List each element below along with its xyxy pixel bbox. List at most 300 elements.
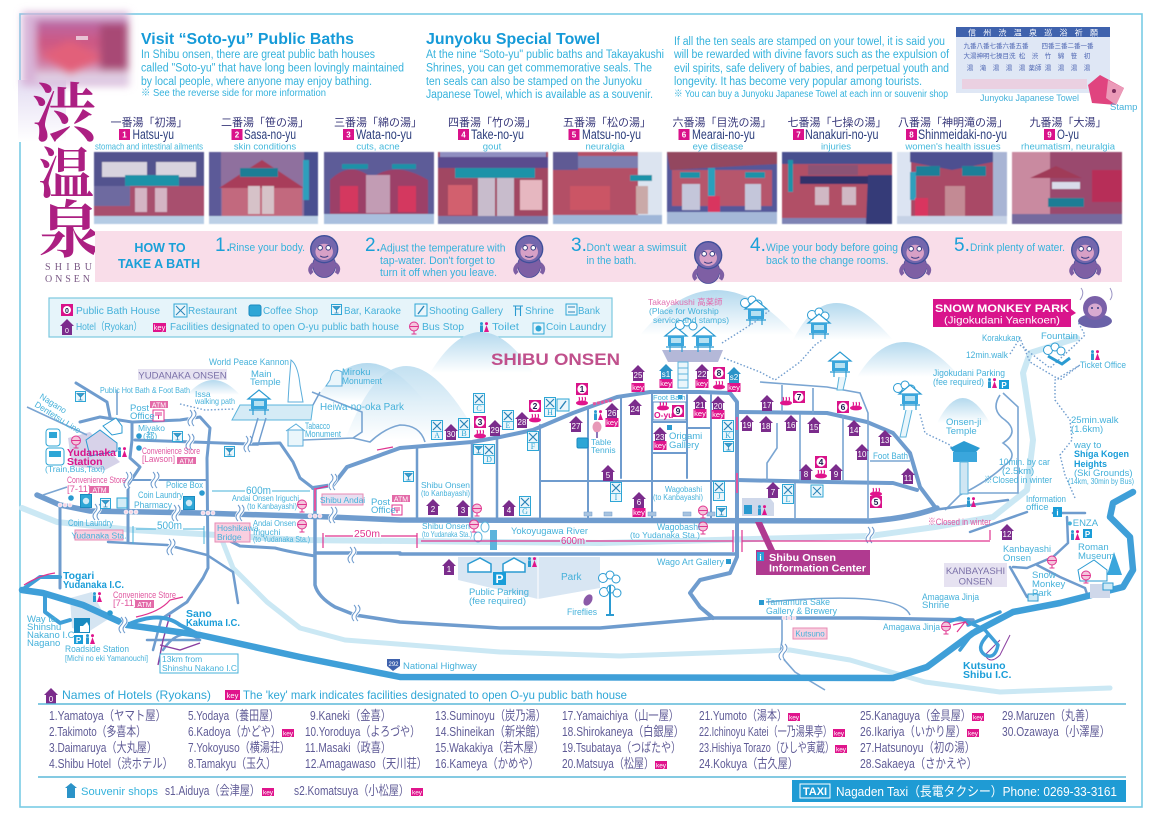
soto-yu photo captions and names: 6 bbox=[682, 130, 687, 140]
map labels: Kanbayashi side: Park bbox=[1032, 588, 1052, 599]
restaurant G: G bbox=[522, 507, 528, 516]
map background hills bbox=[187, 290, 990, 440]
map labels: Shibu town: Yokoyugawa River bbox=[511, 526, 588, 537]
Junyoku towel illustration: 七番 bbox=[990, 41, 1003, 50]
legend: names of hotels: 0 bbox=[49, 695, 54, 704]
restaurant H: H bbox=[547, 408, 553, 417]
bath 1: 1 bbox=[580, 384, 585, 394]
hotel 16: 16 bbox=[787, 421, 796, 430]
Junyoku towel illustration: 二番 bbox=[1068, 42, 1081, 50]
soto-yu photo captions and names: 9 bbox=[1047, 130, 1052, 140]
Junyoku towel illustration: 綿 bbox=[1058, 51, 1065, 60]
Junyoku towel illustration: 八番 bbox=[976, 42, 990, 50]
map labels: Shibu town: Shibu Onsen bbox=[422, 521, 470, 531]
soto-yu photo captions and names: rheumatism, neuralgia bbox=[1021, 142, 1116, 152]
Junyoku towel illustration: 竹 bbox=[1045, 51, 1052, 60]
map labels: Yudanaka side: Togari bbox=[63, 570, 94, 582]
restaurant J: J bbox=[717, 492, 721, 501]
hotel 23: key bbox=[654, 441, 666, 450]
bus stop bbox=[1082, 571, 1090, 583]
map labels: Yudanaka side: Post bbox=[130, 403, 149, 414]
Junyoku towel illustration: 一番 bbox=[1080, 42, 1094, 50]
map labels: Kanbayashi side: Jigokudani Parking bbox=[933, 368, 1005, 379]
hotel 26 bbox=[605, 403, 619, 427]
map labels: Yudanaka side: Monument bbox=[342, 376, 382, 387]
map legend: Coin Laundry bbox=[546, 321, 607, 333]
restaurant B bbox=[458, 418, 470, 438]
soto-yu photo captions and names: Mearai-no-yu bbox=[692, 127, 755, 142]
panel: Shibu Onsen information center: i bbox=[759, 553, 762, 562]
road pink highlights and arrows bbox=[315, 400, 737, 511]
text block: ten seals benefit: will be rewarded with divine favors such as the expulsion of bbox=[673, 49, 950, 61]
map labels: Kanbayashi side: Kutsuno bbox=[963, 660, 1006, 672]
hotel 9: 9 bbox=[834, 470, 839, 479]
parking sign Jigokudani bbox=[999, 380, 1009, 390]
title: Shibu Onsen: SHIBU ONSEN bbox=[491, 350, 620, 369]
soto-yu photo captions and names: Hatsu-yu bbox=[132, 127, 174, 142]
label box: 13km from Shinshu Nakano bbox=[160, 654, 238, 673]
table tennis bbox=[592, 410, 603, 438]
map labels: Shibu town: (Place for Worship bbox=[649, 306, 719, 316]
step 1: Rinse your body. bbox=[229, 242, 305, 254]
list of hotels: 17.Yamaichiya（山一屋） bbox=[562, 708, 679, 723]
Miroku monument bbox=[326, 370, 342, 386]
hotel 22 bbox=[695, 364, 709, 388]
list of hotels: 29.Maruzen（丸善） bbox=[1002, 708, 1095, 723]
bath 9 O-yu: O-yu bbox=[654, 410, 673, 420]
label box: 13km from Shinshu Nakano: 13km from bbox=[162, 654, 202, 664]
soto-yu photo captions and names: 八番湯「神明滝の湯」 bbox=[898, 115, 1008, 129]
Information center building bbox=[742, 498, 774, 516]
step 5: Drink plenty of water. bbox=[970, 242, 1065, 254]
step 4 bbox=[750, 235, 898, 267]
map labels: Yudanaka side: (都) bbox=[143, 431, 157, 441]
list of hotels: 19.Tsubataya（つばたや） bbox=[562, 740, 681, 755]
Yudanaka Station building bbox=[86, 418, 122, 456]
post office bbox=[153, 410, 164, 421]
restaurant E: E bbox=[506, 421, 511, 430]
map labels: Kanbayashi side: ●ENZA bbox=[1067, 518, 1099, 529]
list of hotels: 25.Kanaguya（金具屋） bbox=[860, 708, 971, 723]
text block: Visit Soto-yu Public Baths: ※ See the reverse side for more information bbox=[141, 88, 326, 99]
list of hotels: 23.Hishiya Torazo（ひしや寅蔵） bbox=[699, 740, 834, 755]
map labels: Kanbayashi side: Snow bbox=[1032, 570, 1056, 581]
restaurant L bbox=[782, 484, 794, 504]
parking sign bbox=[493, 572, 506, 586]
hotel 23 bbox=[653, 427, 667, 450]
map legend: Bus Stop bbox=[422, 321, 464, 333]
list of hotels: 24.Kokuya（古久屋） bbox=[699, 756, 798, 771]
restaurant F: F bbox=[531, 442, 536, 451]
map labels: Kanbayashi side: Amagawa Jinja bbox=[883, 622, 941, 633]
map labels: Kanbayashi side: Amagawa Jinja bbox=[922, 592, 980, 603]
hotel 24: 24 bbox=[631, 405, 640, 414]
hotel 22: 22 bbox=[698, 370, 707, 379]
text block: Junyoku Special Towel: At the nine “Soto-yu" public baths and Takayakushi bbox=[426, 49, 664, 61]
soto-yu photo captions and names: cuts, acne bbox=[356, 142, 400, 152]
Junyoku towel illustration: 目洗 bbox=[1002, 51, 1016, 60]
map labels: Yudanaka side: Monument bbox=[305, 429, 341, 440]
step 2 bbox=[365, 235, 506, 279]
icon: snow monkey in bath bbox=[1078, 288, 1112, 328]
text block: ten seals benefit: If all the ten seals are stamped on your towel, it is said you bbox=[674, 36, 945, 48]
dotted walking paths bbox=[180, 310, 1085, 498]
list of hotels: 16.Kameya（かめや） bbox=[435, 756, 539, 771]
map legend: Restaurant bbox=[188, 305, 237, 317]
Junyoku towel illustration: 信州渋温泉巡浴祈願 bbox=[968, 28, 1098, 38]
soto-yu photo captions and names: gout bbox=[483, 142, 502, 152]
souvenir shop s1 bbox=[659, 364, 673, 388]
bath 2: 2 bbox=[533, 401, 538, 411]
map labels: Shibu town: (to Yudanaka Sta.) bbox=[630, 530, 700, 540]
map labels: Yudanaka side: Nakano I.C bbox=[27, 630, 75, 641]
hotel 12 bbox=[1000, 524, 1014, 540]
Junyoku towel illustration: 初 bbox=[1084, 51, 1091, 60]
label box: Hoshikawa Bridge bbox=[215, 523, 259, 542]
map labels: Kanbayashi side: 10min. by car bbox=[999, 457, 1050, 468]
bus stop bbox=[298, 500, 306, 512]
ATM badges: ATM bbox=[152, 402, 166, 410]
Junyoku towel illustration: 湯 bbox=[1084, 63, 1091, 72]
soto-yu photo captions and names: 五番湯「松の湯」 bbox=[563, 115, 651, 129]
restaurant E bbox=[502, 410, 514, 430]
map legend: Facilities designated to open O-yu public bath house bbox=[170, 321, 399, 333]
hotel 3 bbox=[456, 500, 470, 516]
map labels: Yudanaka side: [Lawson] bbox=[142, 454, 175, 465]
hotel 4 bbox=[502, 500, 516, 516]
heading: how to take a bath: HOW TO bbox=[134, 241, 186, 255]
map labels: Kanbayashi side: office bbox=[1026, 502, 1049, 513]
hotel 20: 20 bbox=[714, 402, 723, 411]
map labels: Kanbayashi side: Information bbox=[1026, 494, 1066, 505]
soto-yu photo captions and names: Take-no-yu bbox=[471, 127, 524, 142]
parking sign ENZA: P bbox=[1085, 530, 1091, 539]
soto-yu photo captions and names: stomach and intestinal ailments bbox=[95, 142, 203, 152]
Roman museum bbox=[1078, 552, 1122, 598]
map labels: Kanbayashi side: Museum bbox=[1078, 551, 1115, 562]
map labels: Kanbayashi side: (14km, 30min by Bus) bbox=[1068, 476, 1134, 486]
hotel 8 bbox=[799, 464, 813, 480]
map labels: Kanbayashi side: Foot Bath bbox=[873, 451, 908, 462]
hotel 28: 28 bbox=[518, 418, 527, 427]
hotel 12: 12 bbox=[1003, 530, 1012, 539]
map legend: Coffee Shop bbox=[263, 305, 318, 317]
toilet bbox=[967, 497, 976, 507]
toilet bbox=[86, 634, 95, 644]
restaurant F bbox=[528, 432, 538, 451]
map legend: key bbox=[154, 323, 166, 332]
icon: monkey rinsing bbox=[310, 236, 338, 278]
legend: names of hotels: Names of Hotels (Ryokans) bbox=[62, 688, 211, 702]
map labels: Yudanaka side: Andai Onsen bbox=[253, 518, 296, 528]
soto-yu photo captions and names: 7 bbox=[796, 130, 801, 140]
list of hotels: key bbox=[283, 730, 294, 738]
hotel 26: 26 bbox=[608, 409, 617, 418]
step 2: Adjust the temperature with bbox=[380, 242, 506, 254]
souvenir shop s1: s1 bbox=[662, 370, 671, 379]
step 3: Don't wear a swimsuit bbox=[586, 242, 686, 254]
map labels: Yudanaka side: Andai Onsen Iriguchi bbox=[232, 493, 299, 503]
parking sign: P bbox=[495, 572, 504, 586]
list of hotels: 4.Shibu Hotel（渋ホテル） bbox=[49, 756, 173, 771]
map labels: Yudanaka side: (to Kanbayashi) bbox=[247, 501, 297, 511]
map labels: Yudanaka side: Post bbox=[371, 497, 390, 508]
restaurant unlabeled bbox=[811, 485, 823, 497]
step 4: Wipe your body before going bbox=[766, 242, 898, 254]
list of hotels: key bbox=[789, 714, 800, 722]
restaurant H bbox=[544, 398, 556, 417]
heading: how to take a bath: TAKE A BATH bbox=[118, 257, 200, 271]
map labels: Kanbayashi side: way to bbox=[1073, 440, 1101, 451]
step 3: 3. bbox=[571, 235, 587, 256]
post office bbox=[392, 505, 402, 515]
list of hotels: 30.Ozawaya（小澤屋） bbox=[1002, 724, 1110, 739]
Junyoku towel illustration: 湯 bbox=[1019, 63, 1026, 72]
map legend: Shrine bbox=[525, 305, 554, 317]
map labels: Yudanaka side: Kakuma I.C. bbox=[186, 617, 240, 629]
step 2: tap-water. Don't forget to bbox=[380, 255, 495, 267]
soto-yu photo captions and names: 2 bbox=[235, 130, 240, 140]
hotel 5: 5 bbox=[606, 471, 611, 480]
hotel 29: 29 bbox=[491, 426, 500, 435]
list of hotels: key bbox=[656, 762, 667, 770]
list of hotels: 18.Shirokaneya（白銀屋） bbox=[562, 724, 684, 739]
heading: how to take a bath bbox=[118, 241, 200, 271]
souvenir shop s2: key bbox=[728, 383, 740, 392]
stamp label: Stamp bbox=[1110, 102, 1137, 113]
bus stop bbox=[942, 622, 950, 634]
map labels: Kanbayashi side: Roman bbox=[1078, 542, 1109, 553]
map labels: Shibu town: Takayakushi 高薬師 bbox=[648, 297, 723, 307]
label box: Hoshikawa Bridge: Bridge bbox=[217, 532, 242, 542]
bath 8 bbox=[713, 367, 725, 389]
information icon bbox=[1053, 507, 1062, 518]
legend: names of hotels: The 'key' mark indicates facilities designated to open O-yu public bath house bbox=[243, 688, 627, 702]
map labels: Yudanaka side: Yudanaka I.C. bbox=[63, 579, 124, 591]
step 5 bbox=[954, 235, 1065, 256]
highway route sign: 292 bbox=[388, 662, 399, 668]
map labels: Yudanaka side: Miyako bbox=[138, 423, 165, 433]
map labels: Yudanaka side: [7-11] bbox=[113, 598, 137, 609]
step 1: 1. bbox=[215, 235, 231, 256]
soto-yu photo captions and names: 1 bbox=[122, 130, 127, 140]
photo: Matsu-no-yu bbox=[553, 152, 662, 224]
step 3 bbox=[571, 235, 686, 267]
hotel 1: 1 bbox=[447, 565, 452, 574]
map labels: Yudanaka side: Dentetsu Line bbox=[33, 399, 83, 436]
bar bbox=[224, 446, 234, 456]
Junyoku towel illustration: 渋 bbox=[1032, 51, 1039, 60]
map labels: Shibu town: Table bbox=[591, 437, 612, 447]
distance label: 250m: 250m bbox=[354, 528, 380, 540]
road bridge marks bbox=[93, 410, 874, 660]
information icon: i bbox=[1056, 508, 1059, 518]
map labels: Kanbayashi side: Gallery & Brewery bbox=[766, 606, 837, 617]
map labels: Shibu town: Public Parking bbox=[469, 587, 529, 598]
Junyoku towel illustration: 湯 bbox=[1006, 63, 1013, 72]
Junyoku towel illustration: 松 bbox=[1019, 51, 1026, 60]
restaurant K: K bbox=[725, 431, 731, 440]
list of hotels bbox=[49, 708, 1110, 771]
panel: taxi contact: TAXI bbox=[803, 786, 827, 798]
photo: Wata-no-yu bbox=[324, 152, 434, 224]
panel: taxi contact: Nagaden Taxi（長電タクシー）Phone: 0269-33-3161 bbox=[836, 784, 1117, 799]
panel: Snow Monkey Park: (Jigokudani Yaenkoen) bbox=[944, 314, 1060, 326]
Junyoku towel illustration: 七操 bbox=[990, 51, 1003, 60]
panel: Snow Monkey Park: SNOW MONKEY PARK bbox=[935, 303, 1069, 315]
icon: monkey wiping bbox=[901, 237, 929, 278]
list of hotels: key bbox=[836, 746, 847, 754]
Takayakushi hall bbox=[662, 318, 723, 388]
list of hotels: 9.Kaneki（金喜） bbox=[310, 708, 391, 723]
souvenir shops row: s1.Aiduya（会津屋） bbox=[165, 783, 260, 798]
highways bbox=[22, 492, 1133, 678]
soto-yu photo captions and names: 二番湯「笹の湯」 bbox=[221, 115, 309, 129]
soto-yu photo captions and names: 九番湯「大湯」 bbox=[1030, 115, 1106, 129]
map labels: Kanbayashi side: 25min.walk bbox=[1071, 415, 1119, 426]
hotel 6 bbox=[632, 492, 646, 517]
souvenir shops row: key bbox=[412, 790, 423, 796]
step 5: 5. bbox=[954, 235, 970, 256]
text block: Junyoku Special Towel: ten seals can also be stamped on the Junyoku bbox=[426, 76, 642, 88]
bath 3 bbox=[474, 416, 486, 438]
soto-yu photo captions and names: Wata-no-yu bbox=[356, 127, 412, 142]
hotel 21: 21 bbox=[696, 401, 705, 410]
map labels: Yudanaka side: Convenience Store bbox=[113, 590, 176, 601]
restaurant J bbox=[714, 482, 724, 501]
hotel 14 bbox=[847, 420, 861, 436]
map labels: Yudanaka side: 500m bbox=[157, 520, 182, 532]
map labels: Kanbayashi side: Shiga Kogen bbox=[1074, 449, 1129, 459]
panel: taxi contact bbox=[792, 780, 1126, 802]
hotel 1 bbox=[442, 559, 456, 575]
step 2: 2. bbox=[365, 235, 381, 256]
pink road crossing dots bbox=[58, 503, 796, 620]
bus icon bbox=[46, 448, 64, 465]
bath 6: 6 bbox=[841, 402, 846, 412]
bar bbox=[76, 392, 86, 402]
hotel 21 bbox=[693, 395, 707, 418]
toilet bbox=[118, 447, 127, 457]
divider bbox=[38, 704, 1126, 777]
map labels: Kanbayashi side: Tamamura Sake bbox=[766, 597, 830, 608]
text block: ten seals benefit: ※ You can buy a Junyoku Japanese Towel at each inn or souvenir shop bbox=[674, 89, 948, 100]
logo: Shibu Onsen calligraphy bbox=[32, 63, 101, 285]
bus stop bbox=[472, 504, 482, 516]
step 2: turn it off when you leave. bbox=[380, 267, 497, 279]
map labels: Yudanaka side: Office bbox=[130, 411, 155, 422]
map labels: Yudanaka side: Heiwa-no-oka Park bbox=[320, 401, 405, 413]
ATM badges: ATM bbox=[179, 458, 194, 466]
shooting gallery bbox=[557, 399, 569, 411]
Main temple and Kannon statue bbox=[232, 360, 320, 445]
soto-yu photo captions and names: 3 bbox=[346, 130, 351, 140]
map labels: Kanbayashi side: Onsen bbox=[1003, 553, 1031, 564]
list of hotels: 5.Yodaya（養田屋） bbox=[188, 708, 279, 723]
map labels: Yudanaka side: Station bbox=[67, 456, 103, 468]
soto-yu photo captions and names: Matsu-no-yu bbox=[582, 127, 641, 142]
bath 4 bbox=[815, 456, 827, 478]
map labels: Shibu town: Fireflies bbox=[567, 607, 597, 618]
bar bbox=[172, 432, 182, 442]
step 3: in the bath. bbox=[586, 255, 636, 267]
label box: Kanbayashi Onsen: ONSEN bbox=[959, 576, 993, 588]
ATM badges: ATM bbox=[394, 496, 408, 504]
map labels: Yudanaka side: Sano bbox=[186, 608, 212, 620]
soto-yu photo captions and names: 六番湯「目洗の湯」 bbox=[672, 116, 772, 129]
restaurant I bbox=[610, 482, 622, 502]
text block: Visit Soto-yu Public Baths: Visit “Soto-yu” Public Baths bbox=[141, 31, 354, 48]
hotel 11 bbox=[901, 468, 915, 484]
bath 5: 5 bbox=[874, 497, 879, 507]
hotel 25 bbox=[631, 365, 645, 392]
map labels: Yudanaka side: Public Hot Bath & Foot Bath bbox=[100, 385, 190, 395]
distance label: 600m: 600m bbox=[561, 535, 585, 547]
logo: Shibu Onsen calligraphy: ONSEN bbox=[45, 274, 90, 285]
label box: Shibu Andai: Shibu Andai bbox=[320, 495, 365, 505]
fountain bbox=[1044, 343, 1070, 364]
coin laundry bbox=[80, 494, 92, 508]
label box: Hoshikawa Bridge: Hoshikawa bbox=[217, 523, 259, 533]
label box: Kanbayashi Onsen bbox=[944, 563, 1007, 588]
Junyoku towel illustration: 四番 bbox=[1042, 42, 1055, 50]
parking sign Jigokudani: P bbox=[1001, 381, 1007, 390]
souvenir shop s2 bbox=[727, 367, 741, 392]
bank bbox=[117, 498, 127, 508]
logo: Shibu Onsen calligraphy: 泉 bbox=[39, 181, 101, 270]
map labels: Shibu town: service and stamps) bbox=[653, 315, 729, 325]
step 1 bbox=[215, 235, 305, 256]
soto-yu photo captions and names: 8 bbox=[909, 130, 914, 140]
map labels: Kanbayashi side: Monkey bbox=[1032, 579, 1066, 590]
map labels: Kanbayashi side: Onsen-ji bbox=[946, 417, 981, 428]
ATM badges: ATM bbox=[92, 488, 107, 494]
pavilion shrine bbox=[808, 308, 830, 339]
coin laundry bbox=[184, 496, 194, 510]
text block: Visit Soto-yu Public Baths: by local people, where anyone may enjoy bathing. bbox=[141, 76, 372, 88]
legend: names of hotels: key bbox=[227, 691, 239, 700]
photo: Shinmeidaki-no-yu bbox=[897, 152, 1007, 224]
photo: Nanakuri-no-yu bbox=[782, 152, 892, 224]
bath 7 bbox=[780, 391, 805, 405]
restaurant A: A bbox=[434, 431, 440, 440]
soto-yu photo captions and names: injuries bbox=[821, 142, 851, 152]
map labels: Shibu town: Foot Bath bbox=[653, 393, 686, 402]
map legend: Shooting Gallery bbox=[429, 305, 504, 317]
map labels: Yudanaka side: Iriguchi bbox=[253, 527, 281, 537]
Junyoku towel illustration: 神明 bbox=[976, 51, 990, 60]
map labels: Kanbayashi side: Korakukan bbox=[982, 333, 1020, 344]
list of hotels: 8.Tamakyu（玉久） bbox=[188, 756, 276, 771]
Junyoku towel illustration: 湯 bbox=[1045, 63, 1052, 72]
hotel 19: 19 bbox=[743, 421, 752, 430]
hotel 3: 3 bbox=[461, 506, 466, 515]
map legend: Toilet bbox=[492, 321, 519, 333]
public bath markers bbox=[474, 367, 882, 508]
soto-yu photo captions and names: Nanakuri-no-yu bbox=[805, 127, 878, 142]
logo: Shibu Onsen calligraphy: SHIBU bbox=[45, 262, 93, 273]
restaurant I: I bbox=[615, 493, 618, 502]
panel: Shibu Onsen information center bbox=[755, 522, 870, 575]
hotel 18 bbox=[759, 416, 773, 432]
hotel 23: 23 bbox=[656, 433, 665, 442]
parking sign: P bbox=[76, 636, 82, 645]
hotel 6: 6 bbox=[637, 498, 642, 507]
map labels: Kanbayashi side: Fountain bbox=[1041, 331, 1078, 342]
hotel 15 bbox=[807, 417, 821, 433]
restaurant B: B bbox=[461, 429, 467, 438]
photo: Hatsu-yu bbox=[94, 152, 204, 224]
